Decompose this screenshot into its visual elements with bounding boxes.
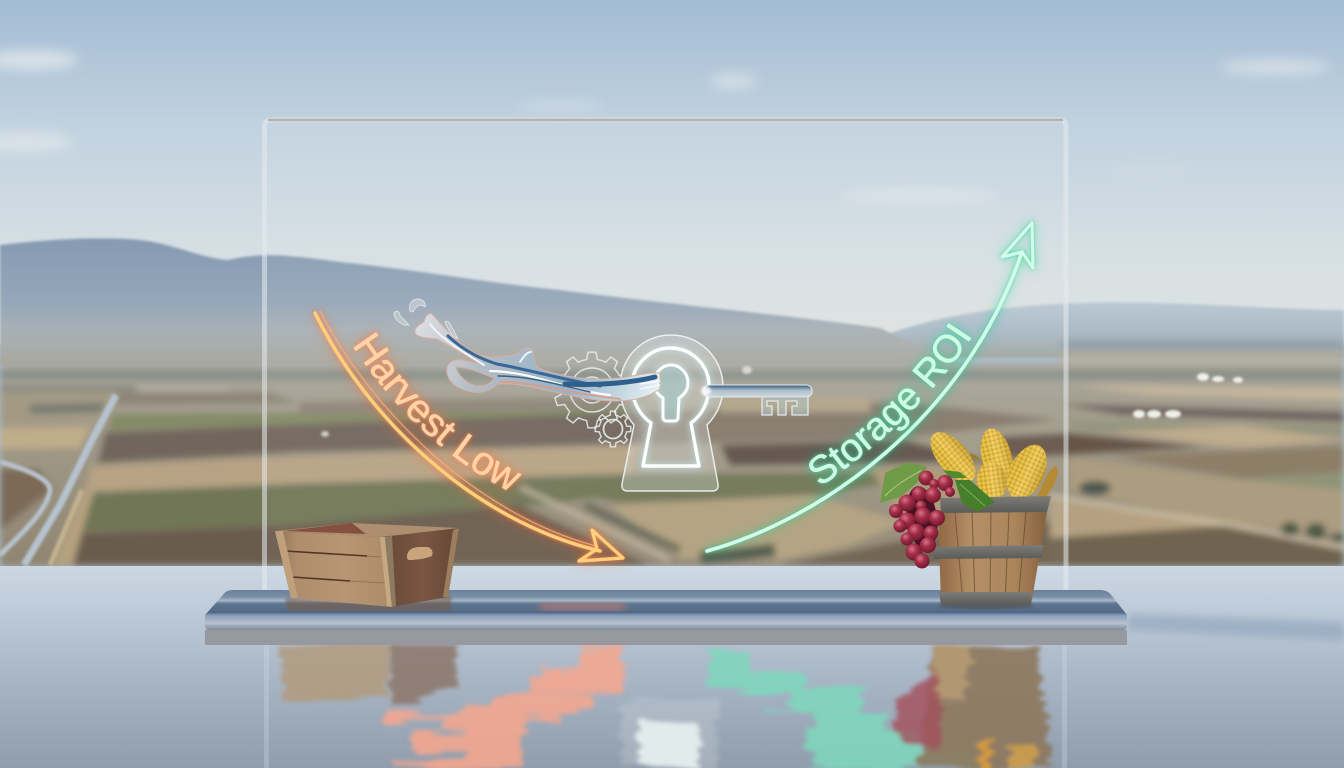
crate handle bbox=[407, 547, 433, 560]
crate contact shadow bbox=[285, 596, 452, 611]
bucket bottom band bbox=[939, 592, 1032, 605]
glass panel bbox=[264, 120, 1067, 600]
distant mountains bbox=[0, 238, 1344, 365]
bucket shadow bbox=[938, 603, 1034, 609]
chart: harvest low downward arrow bbox=[308, 307, 628, 571]
water reflections in table bbox=[280, 640, 1052, 768]
glowing keyhole outline bbox=[632, 348, 709, 466]
icon: bucket of corn and grapes bbox=[880, 424, 1058, 609]
green arrowhead bbox=[1002, 223, 1033, 268]
crate side face bbox=[385, 528, 459, 607]
base platform bbox=[205, 590, 1127, 645]
bucket rim bbox=[940, 496, 1051, 513]
icon: key bbox=[701, 385, 812, 415]
crate front face bbox=[275, 531, 392, 607]
grape cluster bbox=[889, 470, 955, 568]
icon: keyhole bbox=[620, 335, 723, 491]
keyhole glass plate bbox=[620, 335, 723, 491]
big gear bbox=[554, 352, 622, 428]
farmland fields bbox=[0, 340, 1344, 567]
label: storage ROI: Storage ROI bbox=[804, 319, 974, 486]
icon: gears bbox=[553, 352, 631, 447]
chart: storage ROI upward arrow bbox=[702, 217, 1042, 556]
bucket middle band bbox=[933, 545, 1043, 559]
orange arrowhead bbox=[579, 530, 623, 561]
reflection: orange arrow bbox=[385, 640, 622, 768]
corn cobs bbox=[922, 424, 1058, 505]
sky background bbox=[0, 0, 1344, 345]
reflective table surface bbox=[0, 566, 1344, 768]
reflection: bucket and grapes bbox=[895, 645, 1052, 768]
reflection: keyhole bbox=[622, 700, 717, 768]
icon: liquid metal water stream bbox=[394, 299, 660, 401]
icon: empty wooden crate bbox=[275, 523, 459, 611]
water droplets bbox=[394, 299, 458, 339]
distant white farm buildings bbox=[321, 366, 1243, 437]
small gear bbox=[595, 411, 631, 447]
crate interior bbox=[276, 523, 459, 537]
green curve bbox=[707, 223, 1033, 551]
bucket body bbox=[938, 512, 1047, 605]
reflection: crate bbox=[280, 645, 458, 706]
clouds bbox=[0, 50, 1330, 203]
label: harvest low: Harvest Low bbox=[350, 328, 524, 494]
grape leaves bbox=[880, 462, 995, 512]
reflection: green arrow bbox=[709, 650, 974, 768]
reflection: glass edges bbox=[264, 645, 1067, 768]
orange curve bbox=[315, 311, 623, 561]
platform shadow bbox=[1128, 614, 1344, 640]
irrigation canals bbox=[0, 395, 116, 565]
inner keyhole bbox=[654, 365, 688, 421]
